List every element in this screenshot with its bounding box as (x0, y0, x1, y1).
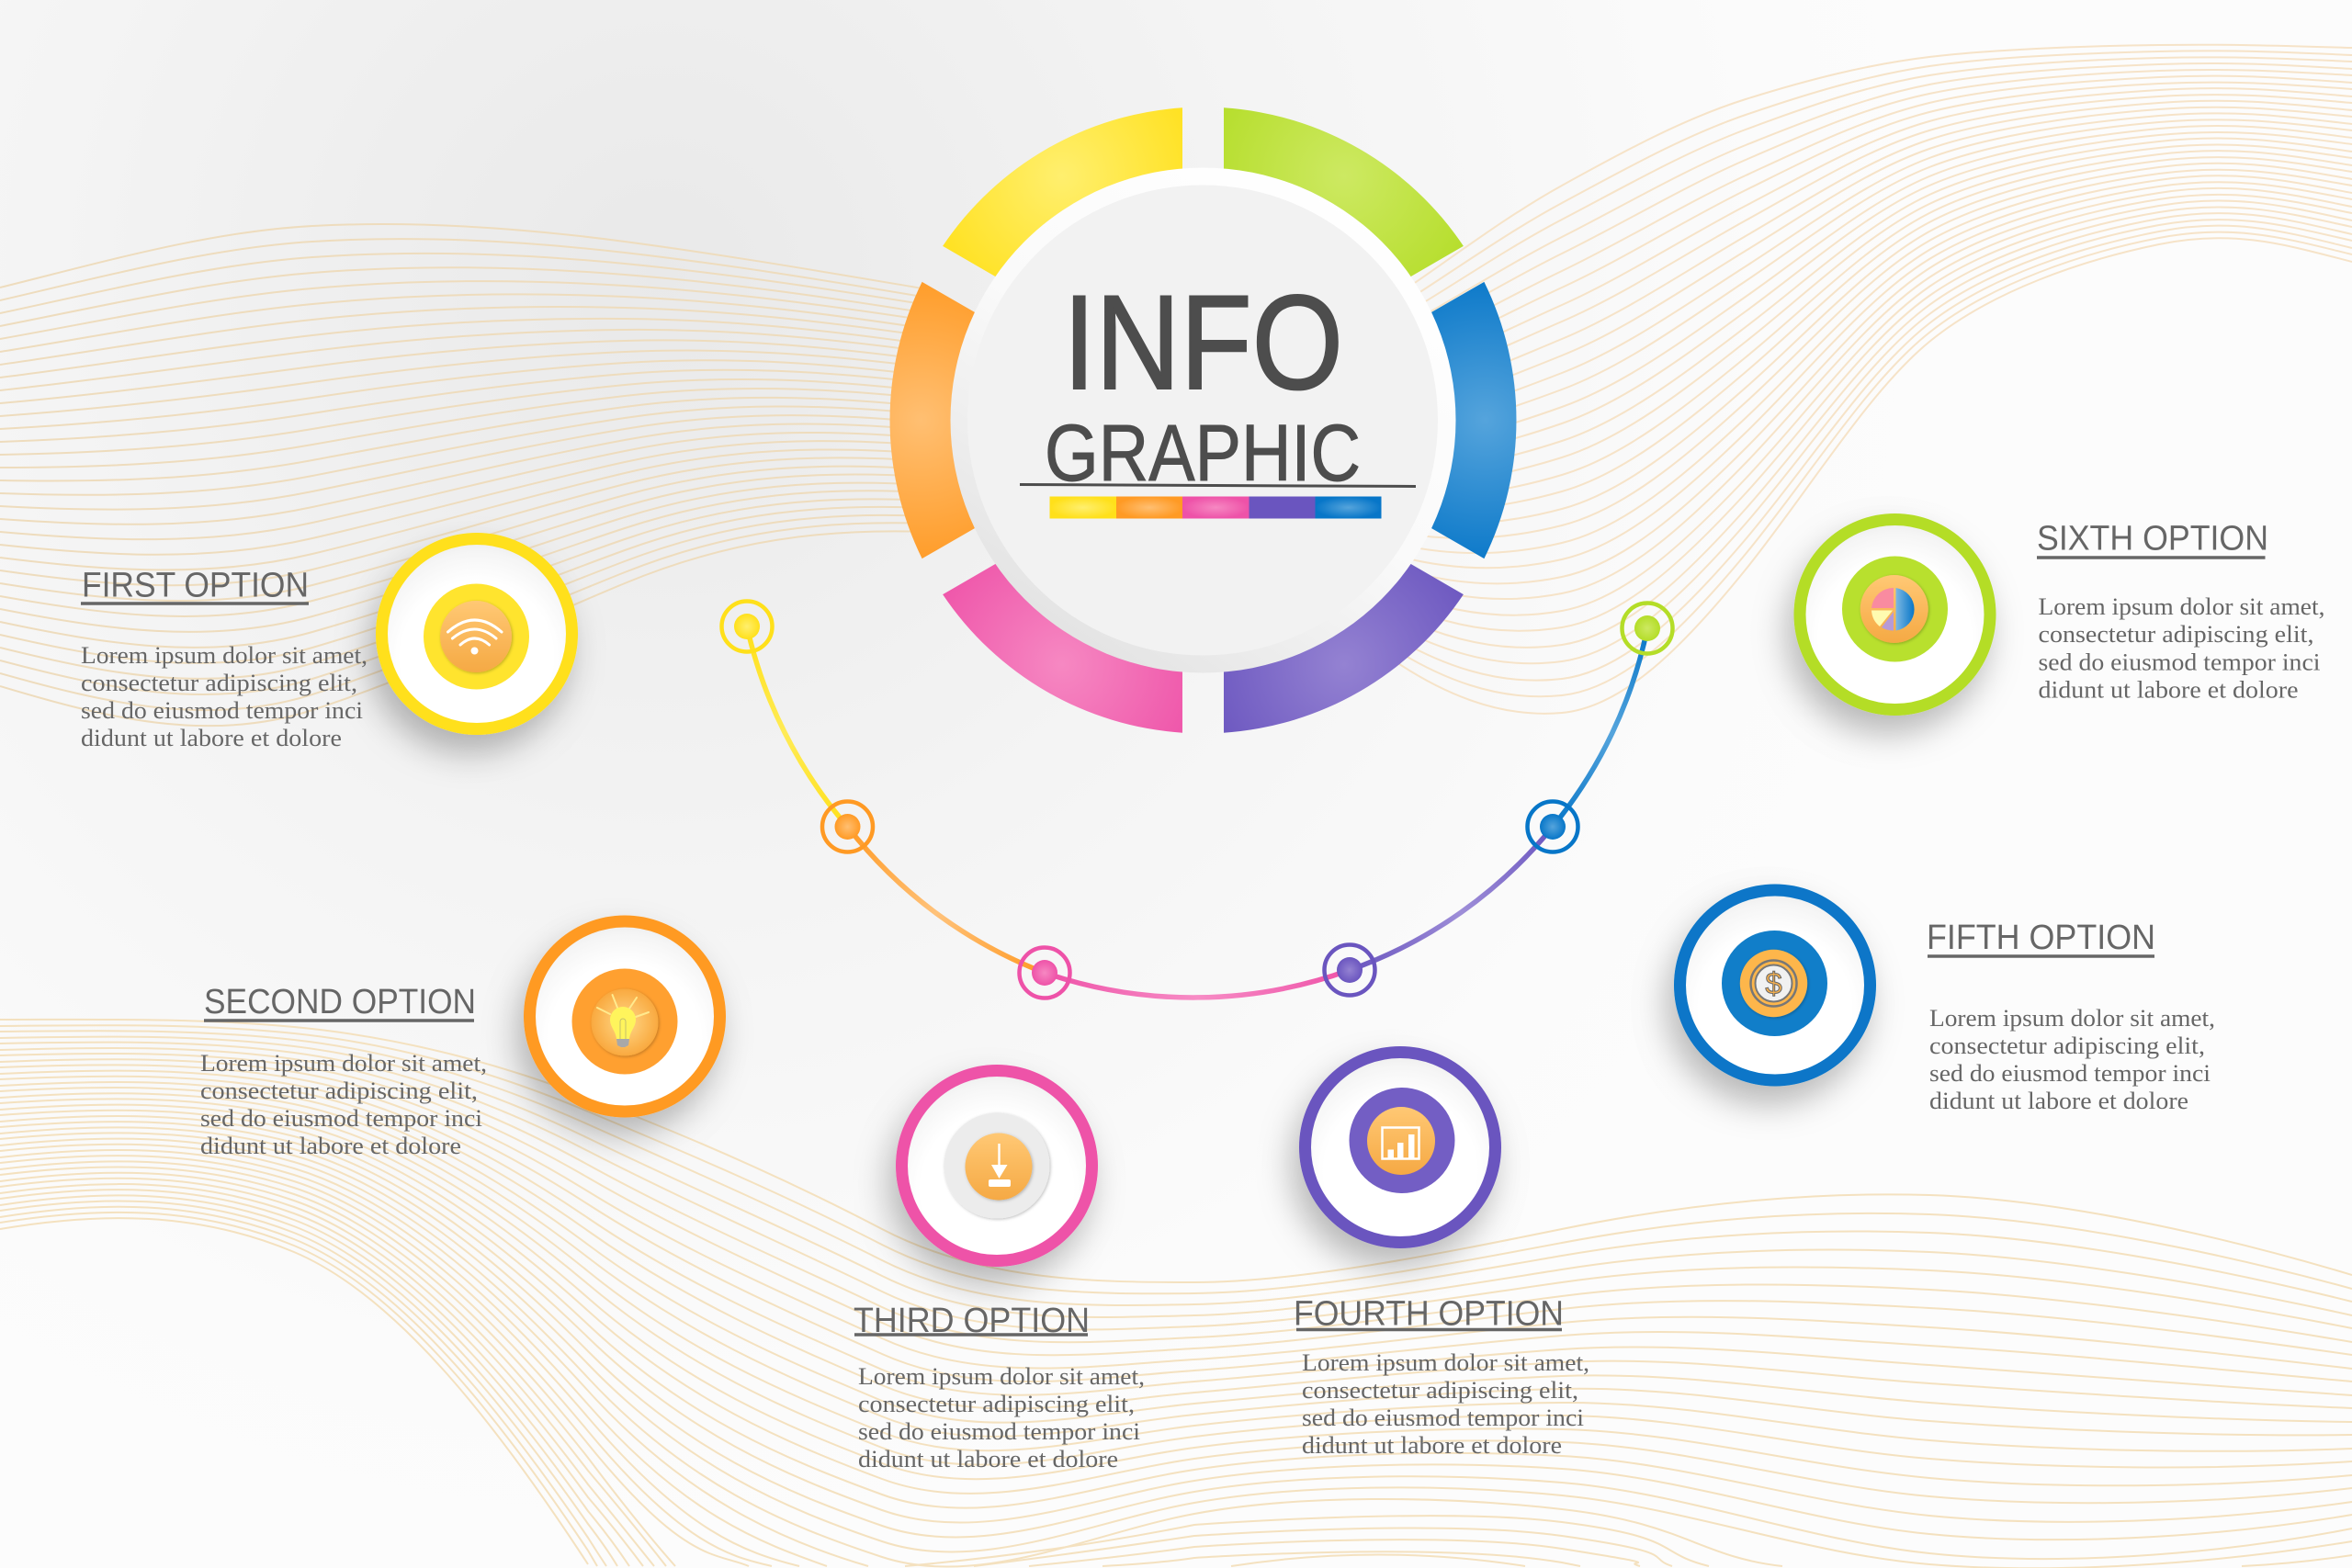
body text: didunt ut labore et dolore (858, 1446, 1118, 1472)
body text (200, 1050, 487, 1159)
node: yellow (722, 601, 772, 652)
body text (1929, 1005, 2215, 1114)
body text (81, 642, 368, 751)
panel: fourth option (1294, 1053, 1589, 1459)
heading: THIRD OPTION (854, 1302, 1090, 1340)
body text: Lorem ipsum dolor sit amet, (858, 1363, 1145, 1390)
node: blue (1527, 801, 1578, 852)
heading: SIXTH OPTION (2037, 520, 2268, 558)
body text: sed do eiusmod tempor inci (2038, 649, 2321, 676)
body text: Lorem ipsum dolor sit amet, (1929, 1005, 2215, 1032)
node: pink (1020, 948, 1069, 998)
node: orange (822, 801, 873, 852)
segment: green (1197, 80, 1479, 292)
body text: consectetur adipiscing elit, (2038, 621, 2313, 648)
body text: consectetur adipiscing elit, (1929, 1032, 2205, 1059)
icon: dollar coin: $ (1765, 966, 1782, 1000)
body text: consectetur adipiscing elit, (200, 1077, 478, 1104)
segment: orange (890, 282, 976, 558)
badge: orange (529, 921, 720, 1111)
panel: first option (81, 538, 571, 751)
badge: green (1800, 520, 1990, 709)
icon: dollar coin (1751, 961, 1797, 1007)
body text: Lorem ipsum dolor sit amet, (81, 642, 368, 669)
body text (2038, 593, 2324, 704)
body text: consectetur adipiscing elit, (858, 1391, 1135, 1417)
badge: purple (1305, 1053, 1496, 1242)
icon: pie chart (1871, 588, 1915, 631)
body text: sed do eiusmod tempor inci (1302, 1404, 1584, 1431)
body text: sed do eiusmod tempor inci (858, 1418, 1140, 1445)
badge: blue (1679, 890, 1871, 1080)
body text: consectetur adipiscing elit, (1302, 1377, 1578, 1404)
body text: consectetur adipiscing elit, (81, 670, 357, 696)
body text: didunt ut labore et dolore (200, 1133, 461, 1159)
body text (858, 1363, 1145, 1472)
segment: blue (1430, 282, 1516, 558)
badge: yellow (382, 538, 571, 729)
icon: light bulb (597, 995, 649, 1047)
title: GRAPHIC: GRAPHIC (1045, 409, 1361, 498)
node: purple (1325, 944, 1374, 996)
heading: FIFTH OPTION (1927, 919, 2155, 957)
body text: didunt ut labore et dolore (1302, 1432, 1562, 1459)
panel: third option (854, 1071, 1145, 1472)
icon: download arrow (989, 1144, 1011, 1187)
title: INFO: INFO (1063, 267, 1343, 417)
icon: bar chart (1382, 1128, 1419, 1159)
body text: didunt ut labore et dolore (1929, 1088, 2188, 1114)
central donut with six coloured segments (890, 80, 1516, 761)
body text: Lorem ipsum dolor sit amet, (2038, 593, 2324, 620)
node: green (1623, 603, 1672, 654)
connector arc with six nodes (722, 601, 1672, 998)
arc segments (747, 626, 1647, 998)
central disc (950, 167, 1455, 672)
body text: didunt ut labore et dolore (81, 725, 342, 751)
body text: sed do eiusmod tempor inci (81, 697, 363, 724)
panel: fifth option (1679, 890, 2215, 1114)
body text: Lorem ipsum dolor sit amet, (1302, 1349, 1589, 1376)
icon: wifi (448, 620, 502, 654)
colour bar (1049, 496, 1382, 518)
badge: pink (902, 1071, 1091, 1260)
heading: FIRST OPTION (82, 566, 309, 604)
panel: second option (200, 921, 720, 1159)
body text: sed do eiusmod tempor inci (1929, 1060, 2211, 1087)
panel: sixth option (1800, 520, 2324, 709)
heading: FOURTH OPTION (1294, 1295, 1564, 1334)
title underline (1020, 485, 1416, 487)
heading: SECOND OPTION (204, 983, 476, 1021)
body text: sed do eiusmod tempor inci (200, 1105, 482, 1132)
body text: didunt ut labore et dolore (2038, 676, 2299, 704)
body text (1302, 1349, 1589, 1459)
body text: Lorem ipsum dolor sit amet, (200, 1050, 487, 1077)
segment: purple (1197, 548, 1479, 761)
segment: yellow (927, 80, 1209, 292)
segment: pink (927, 548, 1209, 761)
